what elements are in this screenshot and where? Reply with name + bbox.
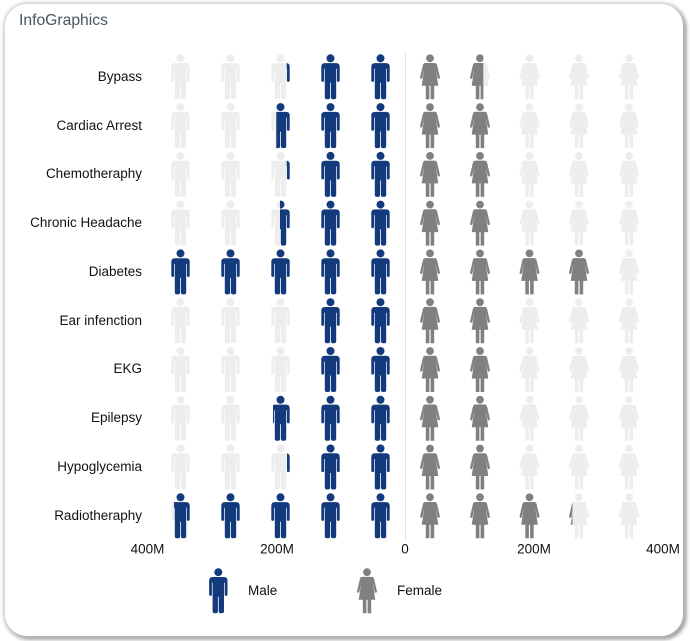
row: Chronic Headache	[30, 201, 639, 246]
row: Hypoglycemia	[57, 444, 639, 490]
row: Bypass: Bypass	[98, 69, 142, 84]
row: Hypoglycemia: Hypoglycemia	[57, 459, 142, 474]
x axis labels: 200M	[260, 542, 294, 556]
row: Cardiac Arrest: Cardiac Arrest	[56, 118, 142, 133]
x axis labels: 400M	[646, 542, 680, 556]
row: Epilepsy	[91, 396, 639, 441]
x axis labels: 200M	[517, 542, 551, 556]
row: Diabetes: Diabetes	[89, 264, 142, 279]
row: Bypass	[98, 54, 639, 99]
row: Chemotheraphy: Chemotheraphy	[46, 166, 142, 181]
row: Radiotheraphy: Radiotheraphy	[54, 508, 142, 523]
row: Chronic Headache: Chronic Headache	[30, 215, 142, 230]
row: EKG	[113, 347, 639, 392]
x axis labels: 400M	[131, 542, 164, 556]
legend: male: Male	[248, 583, 277, 598]
chart title: InfoGraphics	[19, 12, 108, 29]
row: Radiotheraphy	[54, 493, 639, 538]
x axis labels: 0	[401, 542, 409, 556]
legend: female	[357, 568, 442, 613]
row: Cardiac Arrest	[56, 103, 639, 148]
axis line	[404, 52, 406, 541]
row: Diabetes	[89, 249, 639, 294]
row: Chemotheraphy	[46, 152, 639, 197]
row: Epilepsy: Epilepsy	[91, 410, 142, 425]
row: Ear infenction	[59, 298, 639, 343]
row: Ear infenction: Ear infenction	[59, 313, 142, 328]
legend: male	[209, 568, 277, 613]
legend: female: Female	[397, 583, 442, 598]
x axis labels	[131, 542, 680, 556]
row: EKG: EKG	[113, 361, 142, 376]
